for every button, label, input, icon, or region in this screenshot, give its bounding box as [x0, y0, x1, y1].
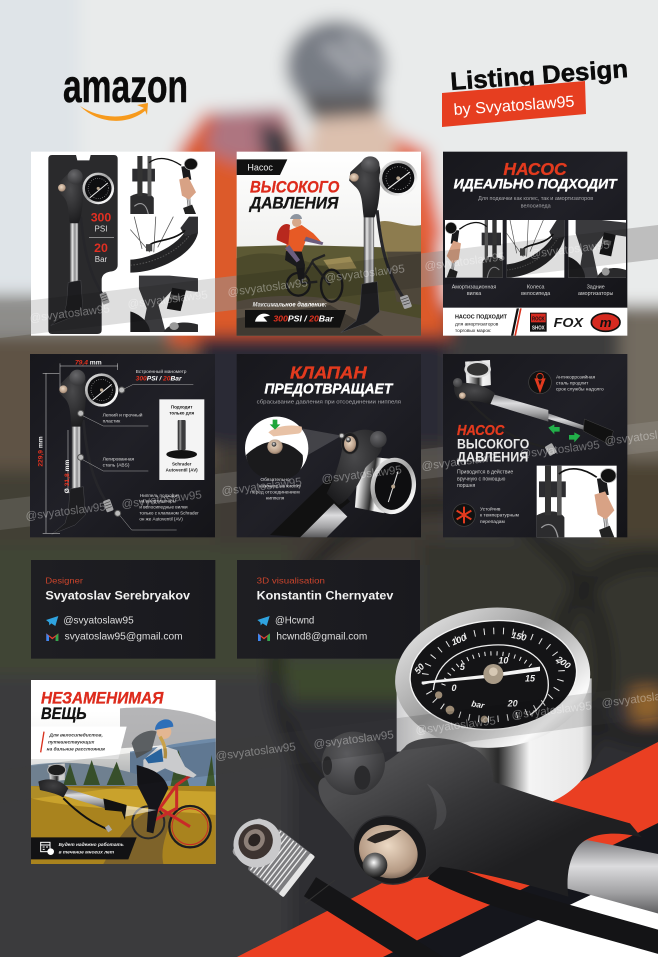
- panel: indispensable thing: [31, 680, 216, 864]
- heading: ДАВЛЕНИЯ: [457, 450, 528, 465]
- card: 3d visualisation: Konstantin Chernyatev: [257, 589, 394, 602]
- callout: for cyclists: [31, 727, 127, 759]
- height dimension: 229,9 mm: [37, 436, 44, 467]
- panel: high pressure pump features: [443, 354, 627, 537]
- heading: НАСОС: [503, 159, 568, 179]
- max pressure label: 300PSI / 20Bar: [273, 315, 334, 324]
- width dimension: 79,4 mm: [75, 359, 102, 366]
- button knob: [322, 732, 385, 795]
- callout: durability: [31, 837, 137, 859]
- image captions: вилка: [467, 291, 481, 297]
- gauge dial: 5: [460, 662, 466, 672]
- text: corrosion resistance: сталь продлит: [556, 381, 589, 386]
- callout: gauge: 300PSI / 20Bar: [136, 376, 182, 383]
- zoom cone: [302, 428, 342, 457]
- panel: high pressure pump with cyclist: [237, 152, 421, 336]
- callout: nipple: он же Autoventil (AV): [139, 516, 183, 521]
- callout: nipple: Ниппель подходит: [140, 493, 180, 498]
- compatibility text: НАСОС ПОДХОДИТ: [455, 314, 508, 320]
- callout: steel: Легированная: [103, 457, 135, 463]
- text: temperature: [480, 506, 519, 525]
- photo background: [31, 707, 216, 864]
- panel: pump packaging and thumbnails: [31, 152, 215, 336]
- gauge body: [390, 601, 595, 803]
- heading: high pressure: ВЫСОКОГО: [250, 178, 339, 197]
- description: вручную с помощью: [457, 476, 506, 482]
- compatibility text: торговых марок:: [455, 329, 491, 334]
- amazon logo: amazon: [63, 60, 188, 112]
- description: Приводится в действие: [457, 468, 513, 475]
- image: fork: [445, 220, 503, 278]
- diameter dimension: Ø 31,8 mm: [64, 460, 71, 493]
- 300 PSI label: 300: [91, 211, 111, 225]
- brand logos: ROCK: [532, 316, 545, 322]
- 300 PSI label: 20: [94, 241, 108, 255]
- gauge dial: 50: [412, 662, 426, 676]
- heading: сбрасывание давления при отсоединении ниппеля: [257, 399, 401, 405]
- inset caption: перед отсоединением: [250, 490, 300, 495]
- callout: durability: в течение многих лет: [59, 850, 115, 855]
- thumbnail: fork: [130, 156, 198, 214]
- heading: ВЫСОКОГО: [457, 436, 530, 451]
- gauge dial: 150: [511, 630, 527, 643]
- watermark text: @svyatoslaw95: [519, 439, 600, 461]
- subtitle: велосипеда: [521, 203, 552, 209]
- card: 3d visualisation: [237, 560, 420, 659]
- card: 3d visualisation: hcwnd8@gmail.com: [276, 632, 367, 643]
- max pressure label: Максимальное давление:: [253, 301, 327, 309]
- dimension lines: [43, 363, 118, 533]
- watermark text: @svyatoslaw95: [511, 700, 592, 722]
- callout: schrader valve box: только для: [169, 410, 194, 415]
- pump: [453, 360, 613, 456]
- background band behind panels: [0, 225, 658, 803]
- heading: [41, 688, 164, 723]
- gauge: [351, 453, 420, 517]
- callout: nipple: на амортизаторы: [139, 499, 176, 504]
- heading: [457, 423, 530, 465]
- callout: schrader valve box: Autoventil (AV): [166, 468, 198, 473]
- card: designer: Svyatoslav Serebryakov: [45, 589, 191, 602]
- icon: corrosion resistance: [529, 371, 551, 394]
- pump handle: [270, 430, 387, 537]
- listing design title: by Svyatoslaw95: [453, 94, 575, 119]
- callout: for cyclists: Для велосипедистов,: [48, 733, 103, 739]
- callout: for cyclists: на дальние расстояния: [47, 746, 105, 752]
- inset caption: нажмите на кнопку: [259, 484, 302, 489]
- image: wheels: [507, 220, 564, 278]
- watermark text: @svyatoslaw95: [424, 251, 505, 273]
- large pump with gauge: [224, 601, 658, 957]
- brand logos: [530, 313, 620, 332]
- callout: nipple: и велосипедные вилки: [139, 504, 188, 509]
- gauge dial: 200: [554, 654, 572, 671]
- heading: ИДЕАЛЬНО ПОДХОДИТ: [454, 176, 618, 192]
- heading: high pressure: ДАВЛЕНИЯ: [248, 193, 339, 212]
- watermark text: @svyatoslaw95: [221, 476, 302, 498]
- gauge dial: 100: [450, 632, 468, 647]
- image captions: Амортизационная: [452, 284, 496, 290]
- card: 3d visualisation: @Hcwnd: [275, 616, 314, 627]
- watermark text: @svyatoslaw95: [227, 277, 308, 299]
- gauge dial: 15: [525, 674, 536, 684]
- text: temperature: перепадам: [480, 520, 505, 525]
- watermark text: @svyatoslaw95: [121, 489, 202, 511]
- watermark text: @svyatoslaw95: [25, 501, 106, 523]
- image captions: велосипеда: [521, 291, 550, 297]
- listing design title: Listing Design: [449, 55, 629, 96]
- text: corrosion resistance: Антикоррозийная: [556, 373, 596, 380]
- subtitle: Для подкачки как колес, так и амортизаторов: [478, 196, 593, 202]
- callout: for cyclists: путешествующих: [48, 740, 95, 745]
- watermark text: @svyatoslaw95: [313, 729, 394, 751]
- text: temperature: Устойчив: [480, 506, 501, 513]
- description: поршня: [457, 483, 476, 489]
- callout: nipple: только с клапаном Schrader: [139, 510, 199, 515]
- callout: steel: сталь (ABS): [103, 463, 130, 469]
- tag: pump: Насос: [247, 162, 273, 172]
- aluminium tube: [567, 840, 658, 915]
- callout: gauge: [119, 368, 193, 393]
- heading: КЛАПАН: [290, 362, 368, 382]
- pump on card: [51, 169, 114, 326]
- gauge dial: 10: [498, 655, 508, 665]
- gauge dial: 20: [507, 699, 518, 709]
- cyclist: [132, 719, 211, 847]
- photo: hand pumping fork: [537, 466, 617, 537]
- 300 PSI label: PSI: [95, 225, 107, 234]
- brand logos: m: [600, 315, 612, 330]
- text: corrosion resistance: [556, 373, 604, 393]
- hose: [433, 868, 658, 943]
- brand logos: FOX: [554, 316, 585, 330]
- callout: gauge: Встроенный манометр: [136, 368, 187, 375]
- 300 PSI label: [89, 211, 114, 264]
- card: designer: Designer: [45, 576, 83, 586]
- 300 PSI label: Bar: [95, 255, 108, 264]
- card: 3d visualisation: 3D visualisation: [257, 576, 325, 586]
- cyclist: [277, 214, 342, 302]
- panel: pump ideally suits: [443, 152, 627, 336]
- icon: gmail: [46, 633, 58, 641]
- heading: НЕЗАМЕНИМАЯ: [41, 688, 164, 707]
- icon: telegram: [46, 616, 58, 626]
- watermark text: @svyatoslaw95: [529, 239, 610, 261]
- landscape: [237, 221, 421, 336]
- callout: schrader valve box: Schrader: [172, 462, 192, 467]
- image captions: амортизаторы: [578, 291, 613, 297]
- thumbnail: shock: [130, 276, 198, 332]
- brand logos: SHOX: [532, 325, 545, 331]
- icon: telegram: [257, 616, 270, 626]
- callout: schrader valve box: Подходит: [171, 404, 193, 409]
- inset: pressing button: [245, 417, 344, 480]
- gauge dial: [412, 626, 572, 724]
- pump: [38, 763, 157, 832]
- watermark bands: [0, 225, 658, 803]
- text: corrosion resistance: срок службы надолго: [556, 387, 604, 393]
- callout: steel: [78, 454, 148, 471]
- heading: ПРЕДОТВРАЩАЕТ: [264, 381, 394, 397]
- icon: temperature: [453, 504, 475, 526]
- panel: pump specifications: [30, 354, 215, 537]
- callout: schrader valve box: [159, 399, 204, 480]
- packaging card: [48, 155, 118, 334]
- inset caption: Обязательно: [260, 477, 290, 483]
- valve socket: [342, 804, 438, 896]
- thumbnail: wheel: [130, 217, 198, 273]
- pump: [52, 370, 118, 534]
- listing design title: [442, 55, 629, 127]
- max pressure label: [245, 301, 346, 328]
- green arrows: [548, 424, 580, 442]
- callout: nipple: [115, 493, 199, 530]
- card: designer: svyatoslaw95@gmail.com: [65, 632, 183, 643]
- callout: plastic: [78, 410, 148, 426]
- heading: [454, 159, 618, 192]
- panel: valve prevents pressure drop: [237, 354, 421, 537]
- compatibility text: для амортизаторов: [455, 323, 499, 328]
- decorative red and white diagonal stripes: [237, 742, 658, 957]
- text: temperature: к температурным: [480, 514, 519, 519]
- air hose and coupling: [224, 810, 453, 957]
- watermark text: @svyatoslaw95: [29, 303, 110, 325]
- card: designer: [31, 560, 215, 659]
- callout: plastic: Легкий и прочный: [103, 412, 143, 419]
- callout: plastic: пластик: [103, 420, 121, 425]
- description: [457, 468, 513, 489]
- amazon logo: [63, 60, 188, 121]
- inset caption: [250, 477, 302, 501]
- icon: gmail: [258, 633, 270, 641]
- pump head body: [318, 738, 642, 897]
- gauge dial: bar: [471, 698, 486, 711]
- watermark text: @svyatoslaw95: [215, 741, 296, 763]
- watermark text: @svyatoslaw95: [324, 263, 405, 285]
- subtitle: [478, 196, 593, 209]
- gauge dial: 0: [451, 683, 456, 693]
- image captions: [452, 284, 613, 297]
- compatibility text: [455, 308, 522, 336]
- image captions: Задние: [587, 284, 605, 290]
- watermark text: [25, 239, 658, 763]
- callout: durability: Будет надежно работать: [59, 841, 124, 848]
- watermark text: @svyatoslaw95: [415, 715, 496, 737]
- card: designer: @svyatoslaw95: [63, 616, 134, 627]
- watermark text: @svyatoslaw95: [421, 451, 502, 473]
- heading: ВЕЩЬ: [41, 704, 87, 723]
- heading: [257, 362, 401, 405]
- image: shock: [568, 220, 626, 278]
- heading: НАСОС: [457, 423, 505, 439]
- inset caption: ниппеля: [266, 496, 285, 501]
- watermark text: @svyatoslaw95: [127, 289, 208, 311]
- pump: [341, 156, 417, 333]
- watermark text: @svyatoslaw95: [321, 464, 402, 486]
- image captions: Колеса: [527, 284, 545, 290]
- heading: high pressure: [248, 178, 339, 212]
- tag: pump: [237, 159, 287, 175]
